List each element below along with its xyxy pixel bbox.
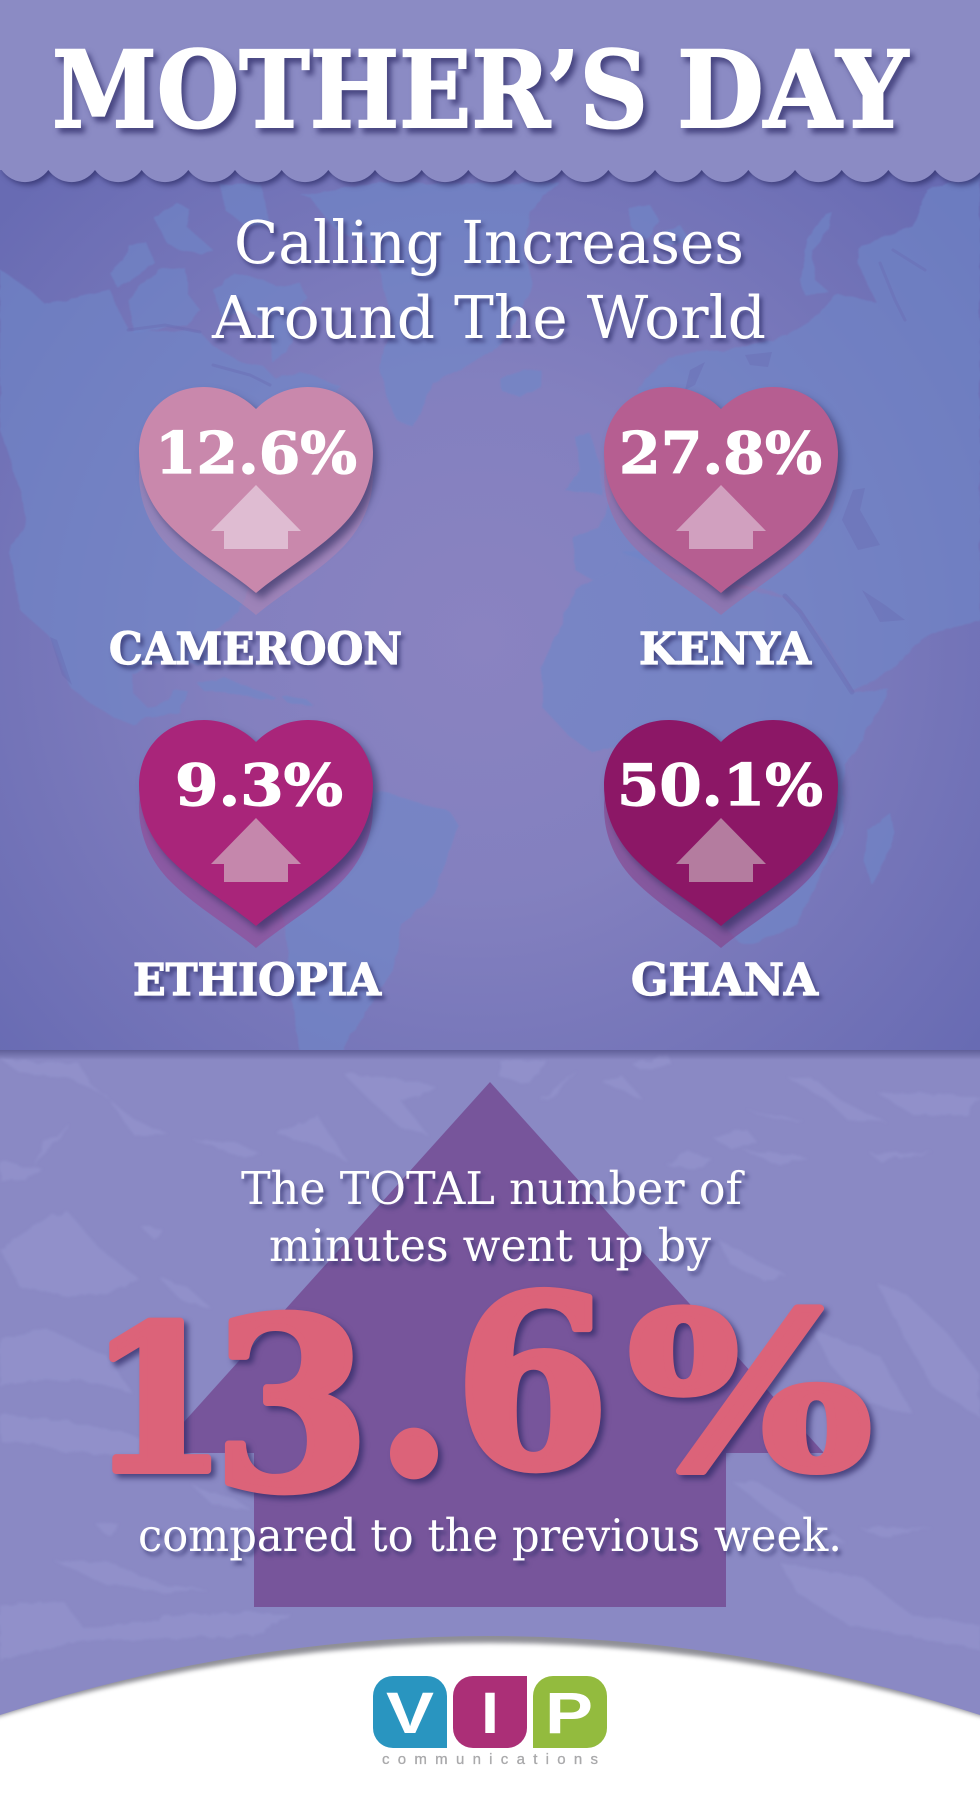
card: Ethiopia (133, 720, 382, 1006)
paper texture (0, 1054, 980, 1660)
big number: 13.6% (89, 1244, 872, 1544)
heart: Cameroon (139, 387, 373, 615)
subtitle (211, 208, 766, 352)
logo tile: V (373, 1676, 447, 1748)
title: DAY (677, 27, 909, 152)
inland water shapes (50, 352, 905, 685)
footer curve (0, 1636, 980, 1800)
world map continents (0, 172, 980, 1052)
text: The TOTAL number of minutes went up by: minutes went up by (269, 1219, 712, 1272)
text: The TOTAL number of minutes went up by (241, 1162, 745, 1272)
up arrow icon (676, 485, 766, 549)
heart: Kenya (604, 387, 838, 615)
heart: Ethiopia (139, 720, 373, 948)
logo tile: I: I (481, 1681, 499, 1746)
panel: world map background (0, 0, 980, 1052)
text: The TOTAL number of minutes went up by: The TOTAL number of (241, 1162, 745, 1215)
big number: 13.6%: 1 (89, 1283, 227, 1518)
big number: 13.6%: . (376, 1252, 452, 1528)
VIP communications logo (373, 1676, 607, 1768)
logo tile: I (453, 1676, 527, 1748)
up arrow icon (211, 485, 301, 549)
subtitle: Around The World (211, 283, 766, 352)
big number: 13.6%: % (628, 1266, 872, 1519)
label: Ghana: GHANA (631, 955, 819, 1006)
up arrow icon (676, 818, 766, 882)
value: 9.3%: 9.3% (175, 752, 343, 819)
label: Ethiopia: ETHIOPIA (133, 955, 382, 1006)
logo tile: P (533, 1676, 607, 1748)
logo tile: V: V (386, 1681, 434, 1746)
value: 50.1%: 50.1% (617, 752, 823, 819)
logo wordmark: communications (382, 1751, 598, 1768)
value: 12.6%: 12.6% (155, 420, 357, 487)
label: Cameroon: CAMEROON (109, 624, 402, 675)
big number: 13.6%: 6 (455, 1244, 609, 1522)
up arrow icon (211, 818, 301, 882)
card: Ghana (604, 720, 838, 1006)
label: Kenya: KENYA (639, 624, 812, 675)
title: MOTHER’S (52, 27, 648, 152)
subtitle: Calling Increases (234, 208, 744, 277)
card: Kenya (604, 387, 838, 675)
big number: 13.6%: 3 (213, 1268, 370, 1544)
heart: Ghana (604, 720, 838, 948)
panel: header band with scalloped edge (0, 0, 980, 182)
text: compared to the previous week.: compared to the previous week. (138, 1509, 842, 1562)
value: 27.8%: 27.8% (619, 420, 822, 487)
card: Cameroon (109, 387, 402, 675)
big up arrow (156, 1082, 824, 1607)
logo tile: P: P (545, 1681, 593, 1746)
panel: total minutes section (0, 1050, 980, 1800)
section shadow (0, 1050, 980, 1060)
inland seas and channels (128, 250, 925, 692)
